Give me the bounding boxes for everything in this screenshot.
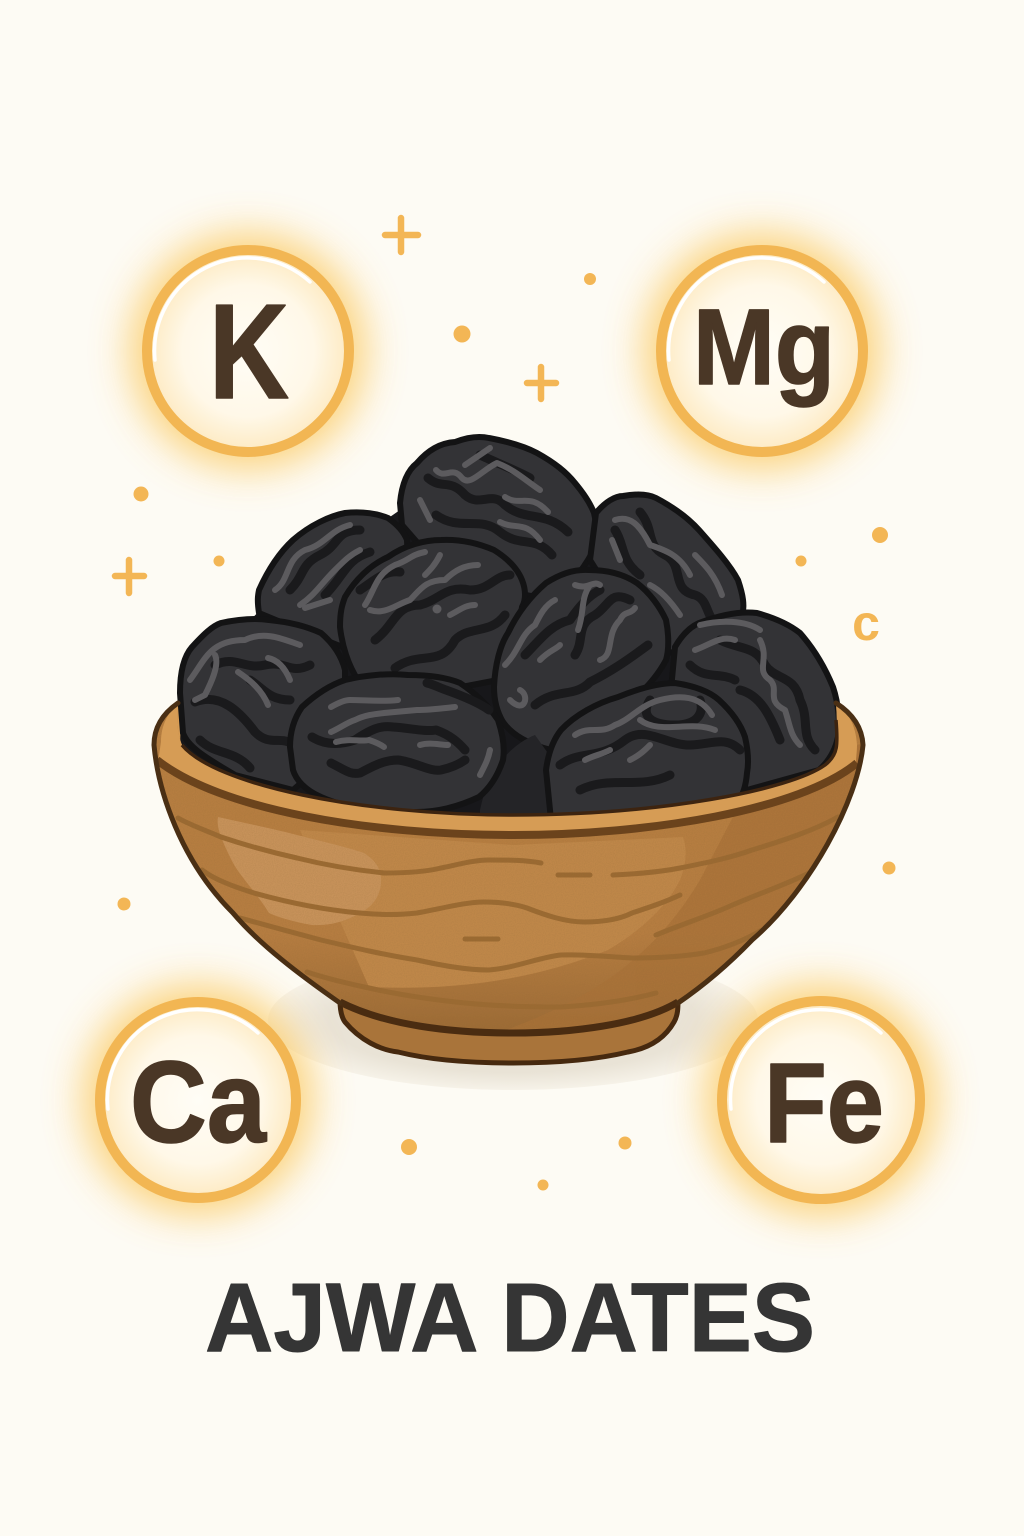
bowl front bbox=[150, 700, 870, 1063]
infographic: Ajwa dates minerals bbox=[56, 206, 964, 1352]
date: lower middle bbox=[480, 735, 560, 820]
title: AJWA DATES bbox=[205, 1263, 815, 1372]
decorative sparkles bbox=[115, 218, 896, 1190]
date: top bbox=[400, 437, 596, 600]
nutrient badge: Mg bbox=[644, 233, 880, 469]
date: center right bbox=[494, 570, 668, 750]
bowl rim inner edge bbox=[182, 720, 837, 815]
bowl rim band bbox=[158, 703, 857, 835]
bowl back rim and interior bbox=[161, 703, 857, 830]
date: center left bbox=[340, 540, 525, 695]
nutrient badge: Fe: Fe bbox=[764, 1040, 884, 1166]
bowl foot line bbox=[340, 1002, 678, 1033]
bowl rim lower line bbox=[157, 760, 857, 835]
bowl body bbox=[154, 703, 863, 1033]
nutrient badge: Ca: Ca bbox=[130, 1037, 267, 1167]
date: front left bbox=[290, 674, 504, 812]
bowl of dates bbox=[150, 437, 870, 1063]
date: left bbox=[180, 619, 345, 790]
bowl shadow bbox=[268, 950, 758, 1090]
date: front right bbox=[546, 683, 748, 820]
date: right bbox=[670, 612, 839, 790]
bowl outline bbox=[154, 703, 863, 1003]
nutrient badge: Mg: Mg bbox=[693, 286, 835, 407]
wood tones bbox=[176, 744, 860, 1010]
nutrient badge: Fe bbox=[705, 984, 937, 1216]
date: back right bbox=[590, 495, 743, 660]
bowl foot bbox=[340, 1000, 678, 1063]
nutrient badge: K: K bbox=[209, 276, 289, 427]
plus signs bbox=[115, 218, 556, 593]
dark fill behind the dates bbox=[180, 510, 838, 825]
pile of dates bbox=[180, 437, 839, 820]
nutrient badge: K bbox=[130, 233, 366, 469]
dots bbox=[118, 273, 896, 1190]
nutrient badge: Ca bbox=[83, 985, 313, 1215]
small letter c: c bbox=[852, 595, 880, 651]
date: back left bbox=[258, 512, 410, 650]
